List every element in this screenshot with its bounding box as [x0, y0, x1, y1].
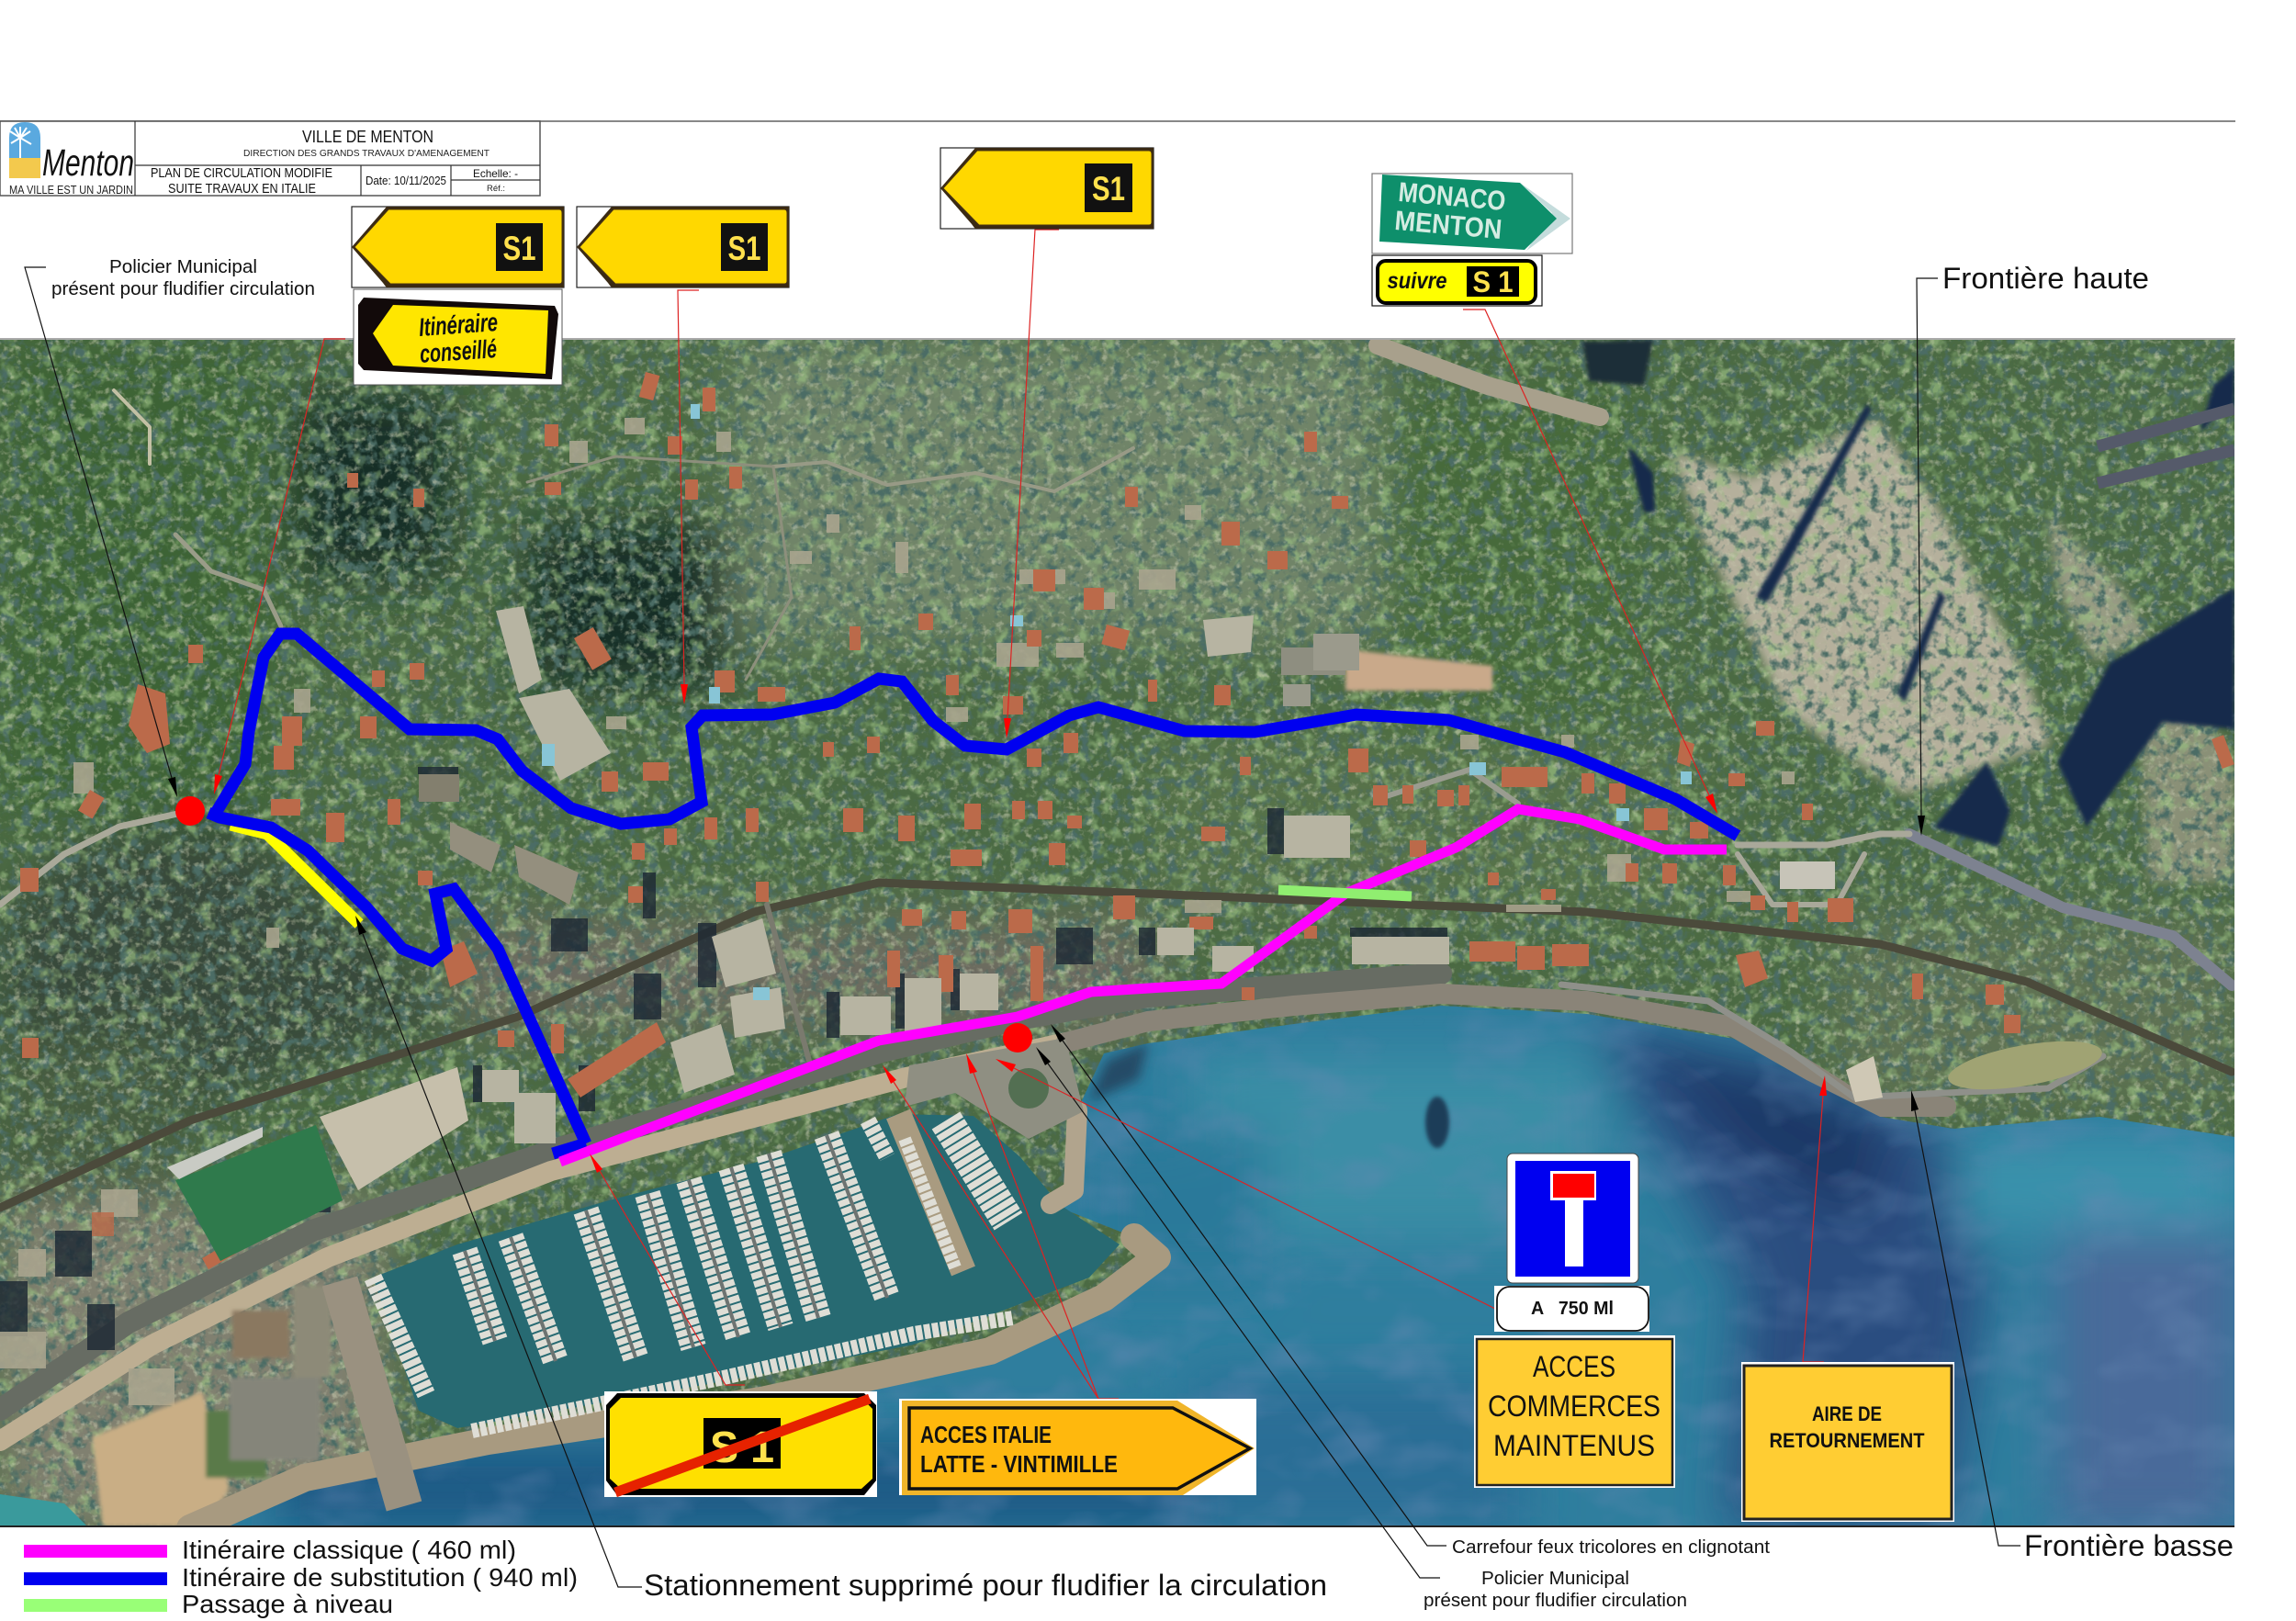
header cartouche: Date: 10/11/2025	[366, 174, 446, 187]
header cartouche: DIRECTION DES GRANDS TRAVAUX D'AMENAGEMENT	[243, 148, 490, 159]
sign: itineraire conseille: conseillé	[419, 334, 498, 368]
panel: distance A 750 Ml	[1494, 1286, 1649, 1332]
seaside park	[1846, 1041, 2102, 1102]
panel: acces commerces maintenus: MAINTENUS	[1493, 1429, 1655, 1462]
logo Menton: MA VILLE EST UN JARDIN	[9, 183, 133, 197]
sign: Monaco Menton: MENTON	[1393, 206, 1503, 245]
aerial map	[0, 339, 2241, 1534]
leader: frontiere basse	[1911, 1090, 2020, 1546]
sign: acces Italie	[899, 1399, 1256, 1495]
sign: Monaco Menton	[1372, 174, 1572, 253]
sign: S1 direction one: S1	[503, 230, 536, 267]
leader: policier west	[25, 267, 177, 797]
mountain rock	[1671, 417, 2234, 882]
quay of the harbour	[190, 1237, 1157, 1528]
sign: end of S1	[604, 1391, 877, 1497]
label: frontiere basse: Frontière basse	[2024, 1529, 2234, 1562]
leader: sign S1 two	[678, 290, 699, 704]
sign: S1 direction two	[577, 207, 789, 287]
panel: aire de retournement: AIRE DE	[1812, 1402, 1882, 1425]
swimming pools	[542, 404, 1692, 1000]
sign: end of S1: S 1	[710, 1424, 774, 1472]
leader: sign itineraire	[214, 339, 345, 794]
label: policier municipal west: Policier Municipal	[109, 257, 257, 277]
viaducts	[2098, 409, 2234, 483]
sea	[190, 1006, 2234, 1526]
panel: aire de retournement	[1741, 1362, 1954, 1522]
logo Menton	[9, 122, 134, 197]
sign: suivre S1	[1372, 255, 1542, 306]
sign: suivre S1: S 1	[1473, 265, 1514, 298]
police point west	[175, 796, 205, 826]
building shadows	[0, 767, 1447, 1350]
sign: acces Italie: ACCES ITALIE	[920, 1421, 1052, 1448]
sign: S1 direction two: S1	[727, 230, 760, 267]
label: policier municipal port	[1424, 1569, 1687, 1611]
sign: Monaco Menton: MONACO	[1397, 177, 1507, 217]
header cartouche	[0, 121, 540, 197]
header cartouche: Echelle: -	[473, 167, 518, 180]
panel: aire de retournement: RETOURNEMENT	[1769, 1429, 1925, 1452]
orange roofs	[20, 372, 2234, 1269]
panel: acces commerces maintenus: COMMERCES	[1488, 1390, 1660, 1423]
legend: classic route: Itinéraire classique ( 460 ml)	[182, 1536, 516, 1564]
label: policier municipal port: Policier Municipal	[1481, 1569, 1629, 1589]
sign: acces Italie: LATTE - VINTIMILLE	[920, 1450, 1118, 1478]
leader: carrefour	[1051, 1024, 1446, 1546]
grey buildings	[320, 606, 1835, 1190]
mountain shadows	[1582, 340, 2234, 847]
sign: itineraire conseille	[354, 289, 562, 385]
header cartouche: SUITE TRAVAUX EN ITALIE	[168, 182, 316, 197]
label: carrefour feux: Carrefour feux tricolores en clignotant	[1452, 1537, 1770, 1558]
legend: level crossing: Passage à niveau	[182, 1590, 393, 1618]
leader: policier port	[1036, 1047, 1440, 1578]
panel: distance A 750 Ml: A 750 Ml	[1531, 1299, 1614, 1319]
legend: substitution route: Itinéraire de substitution ( 940 ml)	[182, 1563, 578, 1592]
parking removed segment	[231, 825, 359, 924]
sign: S1 direction one	[352, 207, 564, 287]
sign: suivre S1: suivre	[1387, 268, 1447, 294]
substitution route	[208, 634, 1738, 1154]
football pitch	[167, 1125, 343, 1261]
header cartouche: PLAN DE CIRCULATION MODIFIE	[151, 166, 332, 181]
leader: sign suivre S1	[1463, 310, 1717, 814]
legend: substitution route	[24, 1563, 578, 1592]
police point port	[1003, 1023, 1032, 1053]
sign: S1 direction three	[940, 148, 1154, 229]
label: policier municipal port: présent pour fludifier circulation	[1424, 1591, 1687, 1611]
harbour	[190, 1038, 1157, 1528]
light building clusters	[0, 418, 1795, 1405]
panel: acces commerces maintenus	[1474, 1335, 1675, 1488]
panel: acces commerces maintenus: ACCES	[1533, 1350, 1615, 1383]
sign: dead end	[1507, 1154, 1638, 1283]
leader: stationnement	[355, 916, 642, 1587]
legend: level crossing	[24, 1590, 393, 1618]
clearing	[1345, 649, 1492, 691]
sign: S1 direction three: S1	[1092, 170, 1125, 208]
sign: itineraire conseille: Itinéraire	[418, 308, 499, 342]
legend: classic route	[24, 1536, 516, 1564]
leader: no S1	[590, 1154, 745, 1385]
header cartouche: Réf.:	[487, 184, 505, 193]
leader: sign S1 three	[1004, 230, 1059, 738]
logo Menton: Menton	[42, 141, 134, 184]
label: frontiere haute: Frontière haute	[1942, 262, 2149, 295]
south-west blocks	[92, 1286, 331, 1526]
label: policier municipal west: présent pour fludifier circulation	[51, 279, 315, 299]
leader: dead end	[996, 1059, 1497, 1310]
roads and railway	[0, 345, 2232, 1441]
classic route	[560, 809, 1727, 1162]
leader: aire de retournement	[1803, 1075, 1827, 1362]
level crossing	[1278, 890, 1412, 896]
texture of vegetation	[0, 339, 2234, 1526]
leader: acces italie	[883, 1053, 1119, 1399]
leader: frontiere haute	[1917, 278, 1938, 836]
bottom-left beach water	[0, 1494, 87, 1526]
routes	[208, 634, 1738, 1162]
legend	[24, 1536, 578, 1618]
label: policier municipal west	[51, 257, 315, 299]
header cartouche: VILLE DE MENTON	[302, 128, 433, 146]
label: stationnement supprime: Stationnement supprimé pour fludifier la circulation	[644, 1569, 1327, 1602]
